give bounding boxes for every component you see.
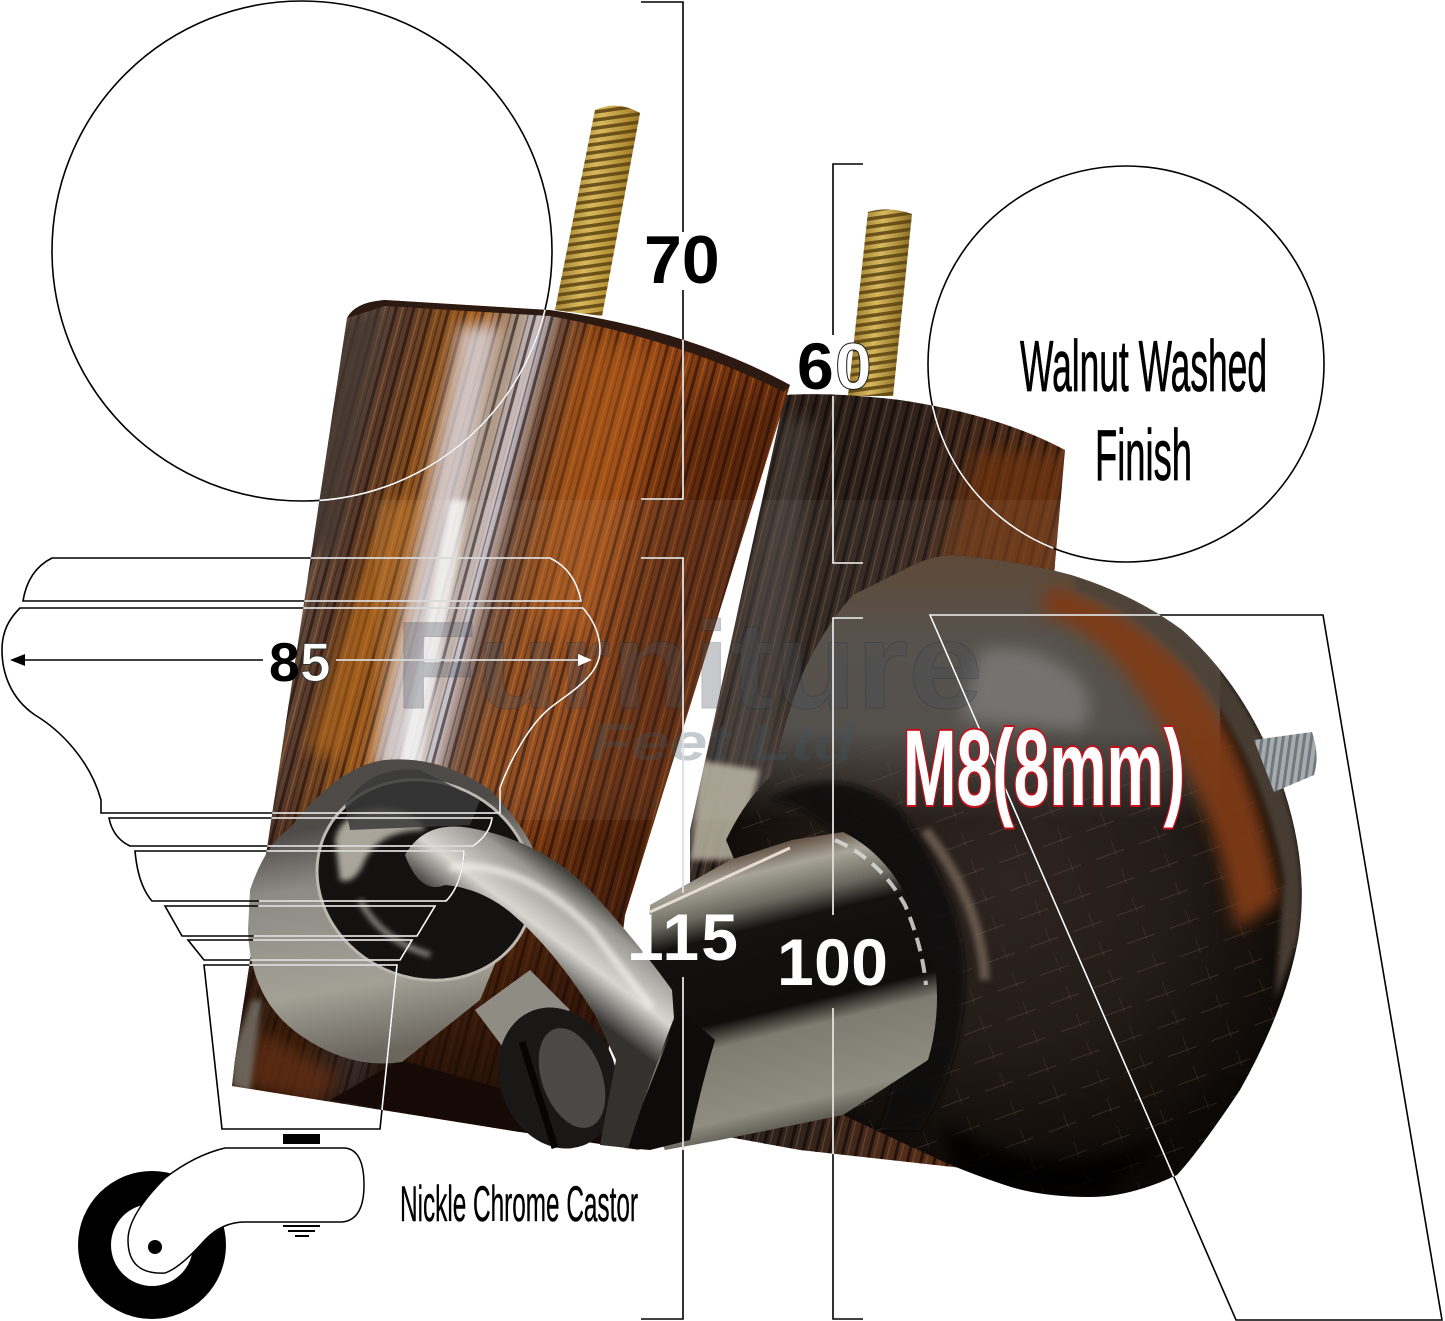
- castor arm: [405, 827, 674, 1148]
- base lines: [283, 1226, 320, 1236]
- floor shadow: [330, 1060, 640, 1150]
- castor arm outline: [128, 1148, 364, 1273]
- threaded stud: right leg: [848, 209, 912, 396]
- label: 60: [797, 329, 872, 403]
- watermark text: Furniture: [395, 597, 983, 735]
- wheel: [78, 1171, 226, 1319]
- label: thread size: M8(8mm): [903, 707, 1185, 828]
- threaded stud: knob: [1254, 732, 1317, 792]
- chrome castor body: [248, 745, 674, 1165]
- label: 100: 100: [777, 925, 888, 999]
- nickel chrome cone: [625, 832, 937, 1150]
- castor screw head: [479, 991, 637, 1165]
- arrow: 85 width: [10, 654, 592, 666]
- cup opening: [284, 745, 566, 1015]
- axle: [148, 1240, 162, 1254]
- wooden knob: [726, 555, 1302, 1197]
- label: walnut washed finish: Finish: [1095, 416, 1192, 496]
- text: Nickle Chrome Castor: [400, 1176, 638, 1232]
- label: 70: 70: [644, 222, 720, 298]
- label: 60: 6: [797, 329, 834, 403]
- label: 85: 5: [300, 631, 331, 693]
- left wooden leg: [220, 106, 800, 1150]
- label: walnut washed finish: [1020, 327, 1267, 496]
- castor icon: [78, 1134, 364, 1319]
- bolt: [475, 970, 570, 1050]
- watermark panel: [375, 500, 1073, 820]
- label: 85: 8: [269, 631, 300, 693]
- threaded stud: left leg: [555, 106, 640, 316]
- mounting plate: [283, 1134, 320, 1144]
- castor cup: [248, 759, 538, 1063]
- label: 85: [269, 631, 331, 693]
- watermark text: Feet Ltd: [590, 714, 857, 772]
- right wooden leg: [680, 209, 1080, 1180]
- label: 60: 0: [835, 329, 872, 403]
- dimension lines and foot outline: white over photo: [249, 310, 1174, 1177]
- label: 115: 115: [627, 900, 738, 974]
